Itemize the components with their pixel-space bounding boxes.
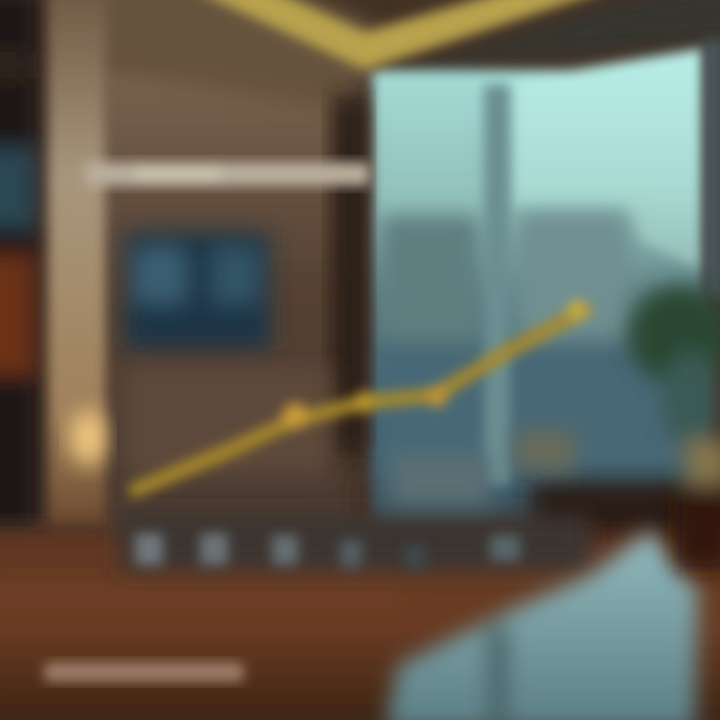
gold trend line <box>135 300 587 490</box>
plant <box>628 285 720 570</box>
window <box>372 48 704 530</box>
blurred headline <box>85 162 370 186</box>
wall screen <box>125 232 270 350</box>
dark column <box>332 95 366 455</box>
left shelving column <box>0 0 38 530</box>
floor reflection <box>385 530 698 720</box>
window mullion <box>484 40 720 485</box>
beige pillar <box>48 0 106 525</box>
chairs <box>135 533 520 569</box>
ceiling <box>60 0 720 110</box>
gold ceiling light <box>190 0 612 70</box>
lower wall panel <box>125 365 330 475</box>
blurred footer text <box>44 662 244 682</box>
conference table and chairs <box>120 430 590 570</box>
distant buildings <box>375 212 685 475</box>
floor <box>0 482 720 720</box>
pillar glow <box>70 410 106 466</box>
